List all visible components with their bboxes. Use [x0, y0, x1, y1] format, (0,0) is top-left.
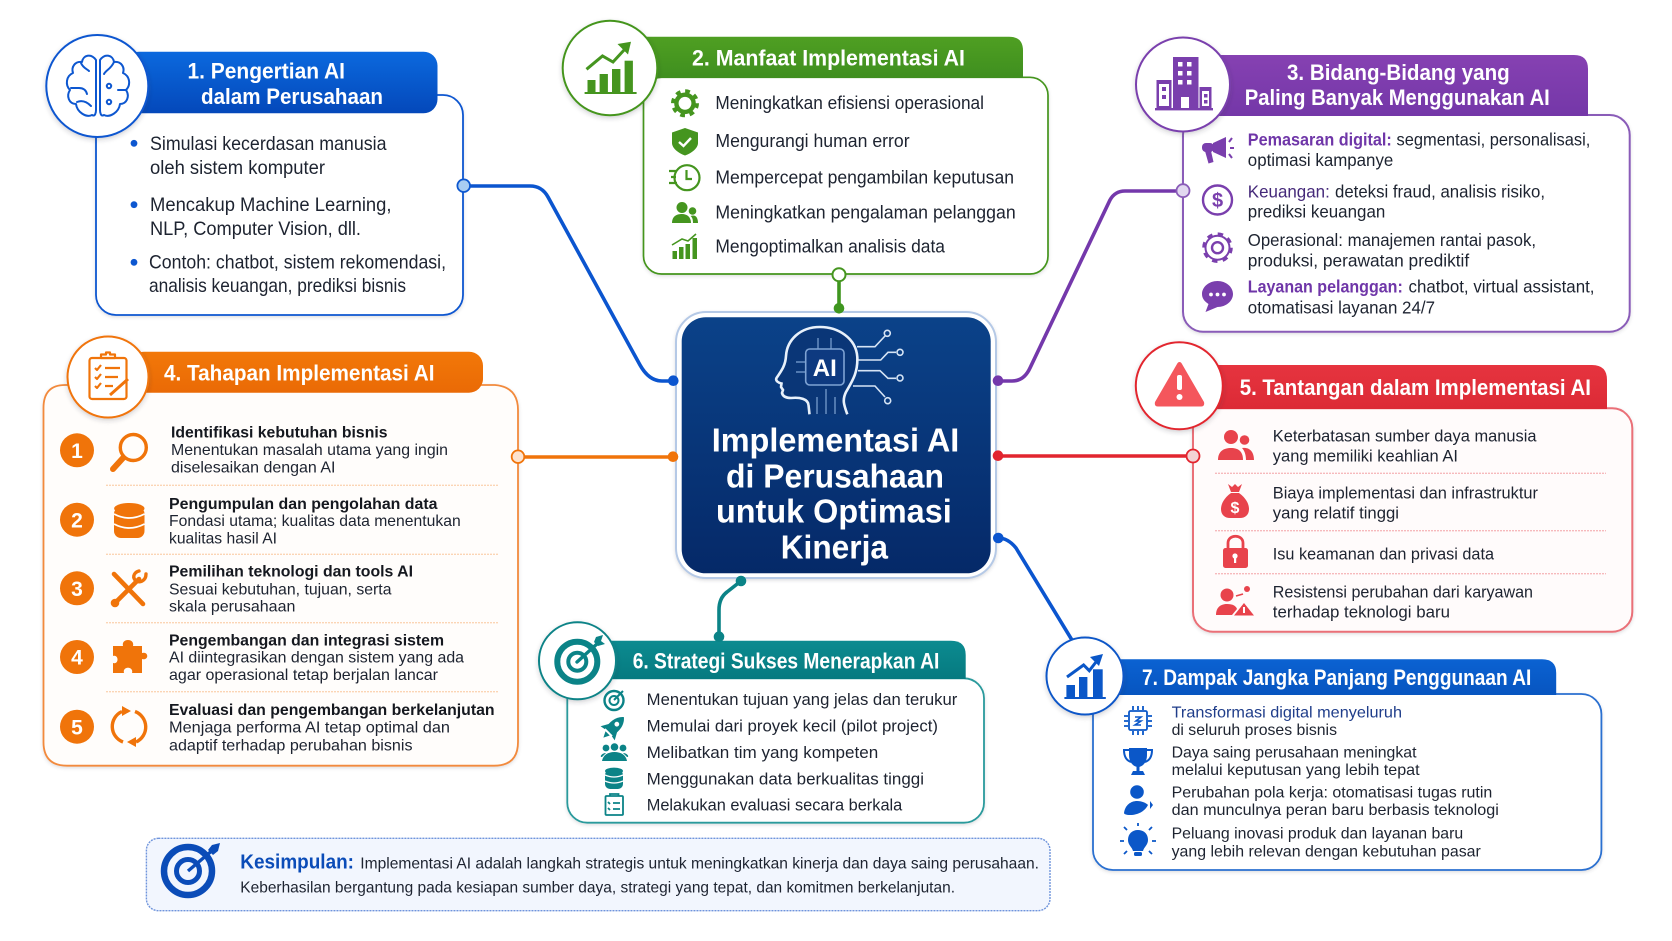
list: impacts: melalui keputusan yang lebih tepat [1172, 762, 1420, 779]
step 2: Pengumpulan dan pengolahan data [169, 496, 438, 513]
connector: panel 3 to centre [998, 191, 1183, 381]
step 4: AI diintegrasikan dengan sistem yang ada [169, 650, 464, 667]
icon: warning triangle [1136, 342, 1223, 429]
list: sectors: deteksi fraud, analisis risiko, [1335, 181, 1545, 201]
step 1: Menentukan masalah utama yang ingin [171, 442, 448, 459]
heading bar 4 [130, 352, 483, 393]
heading bar 5: 5. Tantangan dalam Implementasi AI [1240, 375, 1591, 400]
bullet text block 1 [131, 133, 446, 297]
connector: panel 1 to centre [464, 186, 673, 381]
list: impacts: Peluang inovasi produk dan layanan baru [1172, 825, 1463, 842]
step 2: kualitas hasil AI [169, 530, 277, 547]
central title card [676, 312, 996, 578]
step 3: Pemilihan teknologi dan tools AI [169, 564, 413, 581]
icon: AI head [776, 327, 903, 414]
main title: untuk Optimasi [716, 492, 952, 529]
connector node 1 [457, 179, 470, 192]
connector: panel 6 to centre [719, 581, 741, 637]
icon: AI head: AI [813, 355, 837, 382]
node: panel 6 connector end [714, 631, 724, 642]
icon: puzzle [113, 640, 147, 673]
panel 4: Tahapan Implementasi AI [44, 336, 524, 766]
icon: people [672, 202, 698, 223]
icon: money bag: $ [1231, 500, 1240, 517]
icon: gear [674, 92, 696, 115]
list: strategies: Menentukan tujuan yang jelas dan terukur [647, 691, 958, 709]
step 5 [60, 702, 495, 755]
heading bar 6: 6. Strategi Sukses Menerapkan AI [633, 648, 939, 673]
step 5: adaptif terhadap perubahan bisnis [169, 738, 412, 755]
icon: padlock [1223, 536, 1248, 568]
connector: panel 7 to centre [998, 538, 1075, 645]
list: sectors: Keuangan: [1248, 181, 1330, 201]
icon: clipboard [606, 794, 623, 815]
conclusion text: Kesimpulan: [240, 851, 354, 873]
heading bar 4: 4. Tahapan Implementasi AI [164, 361, 434, 386]
icon: dollar coin: $ [1212, 190, 1223, 212]
heading bar 3: 3. Bidang-Bidang yang [1287, 60, 1510, 85]
step 3: 3 [71, 578, 83, 601]
connector dots on centre card [668, 303, 1004, 586]
list: benefits: Meningkatkan efisiensi operasional [715, 93, 984, 113]
heading bar 5 [1205, 365, 1607, 409]
step 4: 4 [71, 647, 83, 670]
conclusion text: Keberhasilan bergantung pada kesiapan sumber daya, strategi yang tepat, dan komitmen berkelanjutan. [240, 880, 955, 897]
icon: gear outline [1204, 234, 1231, 261]
step 1: 1 [71, 440, 83, 463]
connector node 4 [512, 450, 524, 463]
connector node 3 [1176, 184, 1190, 197]
list: impacts: Perubahan pola kerja: otomatisasi tugas rutin [1172, 784, 1492, 801]
step 5: 5 [71, 716, 83, 739]
step 4: Pengembangan dan integrasi sistem [169, 633, 444, 650]
list: sectors: Pemasaran digital: [1248, 130, 1392, 150]
heading bar 1: dalam Perusahaan [201, 84, 383, 109]
connector: panel 5 to centre [998, 454, 1193, 458]
step 1: diselesaikan dengan AI [171, 460, 336, 477]
list: impacts: dan munculnya peran baru berbasis teknologi [1172, 802, 1499, 819]
icon: shield check [672, 128, 698, 156]
icon: bar chart [672, 234, 697, 259]
heading bar 3: Paling Banyak Menggunakan AI [1245, 85, 1550, 110]
list: sectors: chatbot, virtual assistant, [1408, 277, 1594, 297]
step 4 [60, 633, 464, 684]
step 2: 2 [71, 509, 83, 532]
step 3: Sesuai kebutuhan, tujuan, serta [169, 581, 392, 598]
panel 5: Tantangan [1136, 342, 1632, 632]
icon: office buildings [1136, 38, 1230, 132]
icon: rocket [596, 710, 631, 745]
step 5: Evaluasi dan pengembangan berkelanjutan [169, 702, 495, 719]
step 1 [60, 425, 448, 477]
list: strategies: Memulai dari proyek kecil (pilot project) [647, 718, 938, 736]
connector node 2 [832, 268, 846, 281]
list: sectors: produksi, perawatan prediktif [1248, 251, 1469, 271]
icon: fast clock [669, 165, 700, 190]
list: benefits [669, 92, 1016, 259]
main title [712, 422, 959, 565]
list: challenges: Isu keamanan dan privasi data [1273, 544, 1495, 563]
heading bar 2: 2. Manfaat Implementasi AI [692, 46, 965, 71]
panel 2: Manfaat Implementasi AI [563, 21, 1048, 281]
step 2 [60, 496, 461, 547]
icon: brain [46, 35, 148, 137]
icon: tools [112, 571, 146, 606]
list: strategies: Melibatkan tim yang kompeten [647, 744, 878, 762]
list: sectors: segmentasi, personalisasi, [1396, 130, 1590, 150]
list: impacts [1120, 704, 1499, 861]
heading bar 6 [590, 641, 966, 679]
list: impacts: yang lebih relevan dengan kebutuhan pasar [1172, 844, 1481, 861]
icon: rising chart [1046, 638, 1124, 714]
icon: trophy [1124, 748, 1152, 775]
list: impacts: Daya saing perusahaan meningkat [1172, 745, 1417, 762]
bullet text block 1: NLP, Computer Vision, dll. [150, 218, 361, 240]
icon: person arrow [1124, 785, 1153, 815]
list: challenges: yang memiliki keahlian AI [1273, 447, 1458, 466]
list: challenges: Keterbatasan sumber daya manusia [1273, 427, 1537, 446]
bullet text block 1: analisis keuangan, prediksi bisnis [149, 275, 406, 297]
icon: people [1218, 430, 1254, 460]
icon: conclusion target [164, 843, 220, 895]
list: sectors [1202, 130, 1594, 317]
list: benefits: Mengurangi human error [715, 131, 910, 151]
step 3: skala perusahaan [169, 599, 295, 616]
step 4: agar operasional tetap berjalan lancar [169, 667, 439, 684]
heading bar 3 [1210, 55, 1588, 116]
list: sectors: Operasional: manajemen rantai pasok, [1248, 230, 1536, 250]
icon: small target [604, 691, 624, 710]
connector: panel 4 to centre [518, 455, 673, 459]
conclusion callout [146, 838, 1050, 911]
list: benefits: Meningkatkan pengalaman pelanggan [715, 203, 1016, 223]
icon: light bulb [1120, 823, 1156, 856]
main title: Implementasi AI [712, 422, 959, 459]
list: challenges [1216, 427, 1538, 622]
list: challenges: yang relatif tinggi [1273, 503, 1399, 522]
step 1: Identifikasi kebutuhan bisnis [171, 425, 388, 442]
heading bar 7: 7. Dampak Jangka Panjang Penggunaan AI [1142, 665, 1531, 690]
list: impacts: Transformasi digital menyeluruh [1172, 704, 1402, 721]
list: sectors: Layanan pelanggan: [1248, 277, 1403, 297]
icon: magnifier [113, 434, 146, 469]
icon: chat bubble [1202, 281, 1233, 312]
icon: money bag [1221, 484, 1249, 518]
list: benefits: Mengoptimalkan analisis data [715, 237, 946, 257]
icon: growth chart [563, 21, 657, 115]
list: sectors: prediksi keuangan [1248, 202, 1385, 222]
panel 6: Strategi Sukses [539, 622, 984, 823]
panel 7: Dampak Jangka Panjang [1046, 638, 1601, 870]
list: benefits: Mempercepat pengambilan keputusan [715, 167, 1014, 187]
main title: di Perusahaan [726, 457, 944, 494]
list: strategies [596, 691, 958, 815]
heading bar 1: 1. Pengertian AI [188, 58, 345, 83]
main title: Kinerja [781, 528, 889, 565]
icon: cycle arrows [112, 706, 146, 747]
step 5: Menjaga performa AI tetap optimal dan [169, 720, 450, 737]
icon: chip [1124, 706, 1152, 735]
list: challenges: Resistensi perubahan dari karyawan [1273, 583, 1533, 602]
connector: panel 2 to centre [837, 275, 841, 308]
list: challenges: Biaya implementasi dan infrastruktur [1273, 483, 1538, 502]
list: strategies: Menggunakan data berkualitas tinggi [647, 770, 924, 788]
conclusion text [240, 851, 1039, 897]
icon: dollar coin [1203, 186, 1232, 214]
panel 3: Bidang-Bidang [1136, 38, 1630, 332]
bullet text block 1: Contoh: chatbot, sistem rekomendasi, [149, 252, 446, 274]
panel 1: Pengertian AI [46, 35, 470, 315]
step 2: Fondasi utama; kualitas data menentukan [169, 513, 461, 530]
connector node 5 [1186, 450, 1200, 462]
list: strategies: Melakukan evaluasi secara berkala [647, 797, 903, 815]
list: sectors: otomatisasi layanan 24/7 [1248, 297, 1435, 317]
list: sectors: optimasi kampanye [1248, 150, 1393, 170]
icon: person warning [1216, 586, 1254, 616]
icon: team [601, 743, 628, 761]
icon: database [114, 503, 144, 538]
bullet text block 1: oleh sistem komputer [150, 157, 325, 179]
icon: database [605, 768, 623, 789]
list: challenges: terhadap teknologi baru [1273, 603, 1450, 622]
conclusion text: Implementasi AI adalah langkah strategis untuk meningkatkan kinerja dan daya saing perusahaan. [360, 855, 1039, 872]
bullet text block 1: Simulasi kecerdasan manusia [150, 133, 387, 155]
step 3 [60, 564, 413, 616]
bullet text block 1: Mencakup Machine Learning, [150, 194, 392, 216]
icon: target [539, 622, 616, 699]
list: impacts: di seluruh proses bisnis [1172, 722, 1337, 739]
heading bar 2 [630, 37, 1023, 78]
icon: megaphone [1202, 137, 1234, 164]
heading bar 7 [1110, 659, 1556, 695]
icon: clipboard checklist [68, 336, 148, 418]
heading bar 1 [125, 52, 438, 113]
